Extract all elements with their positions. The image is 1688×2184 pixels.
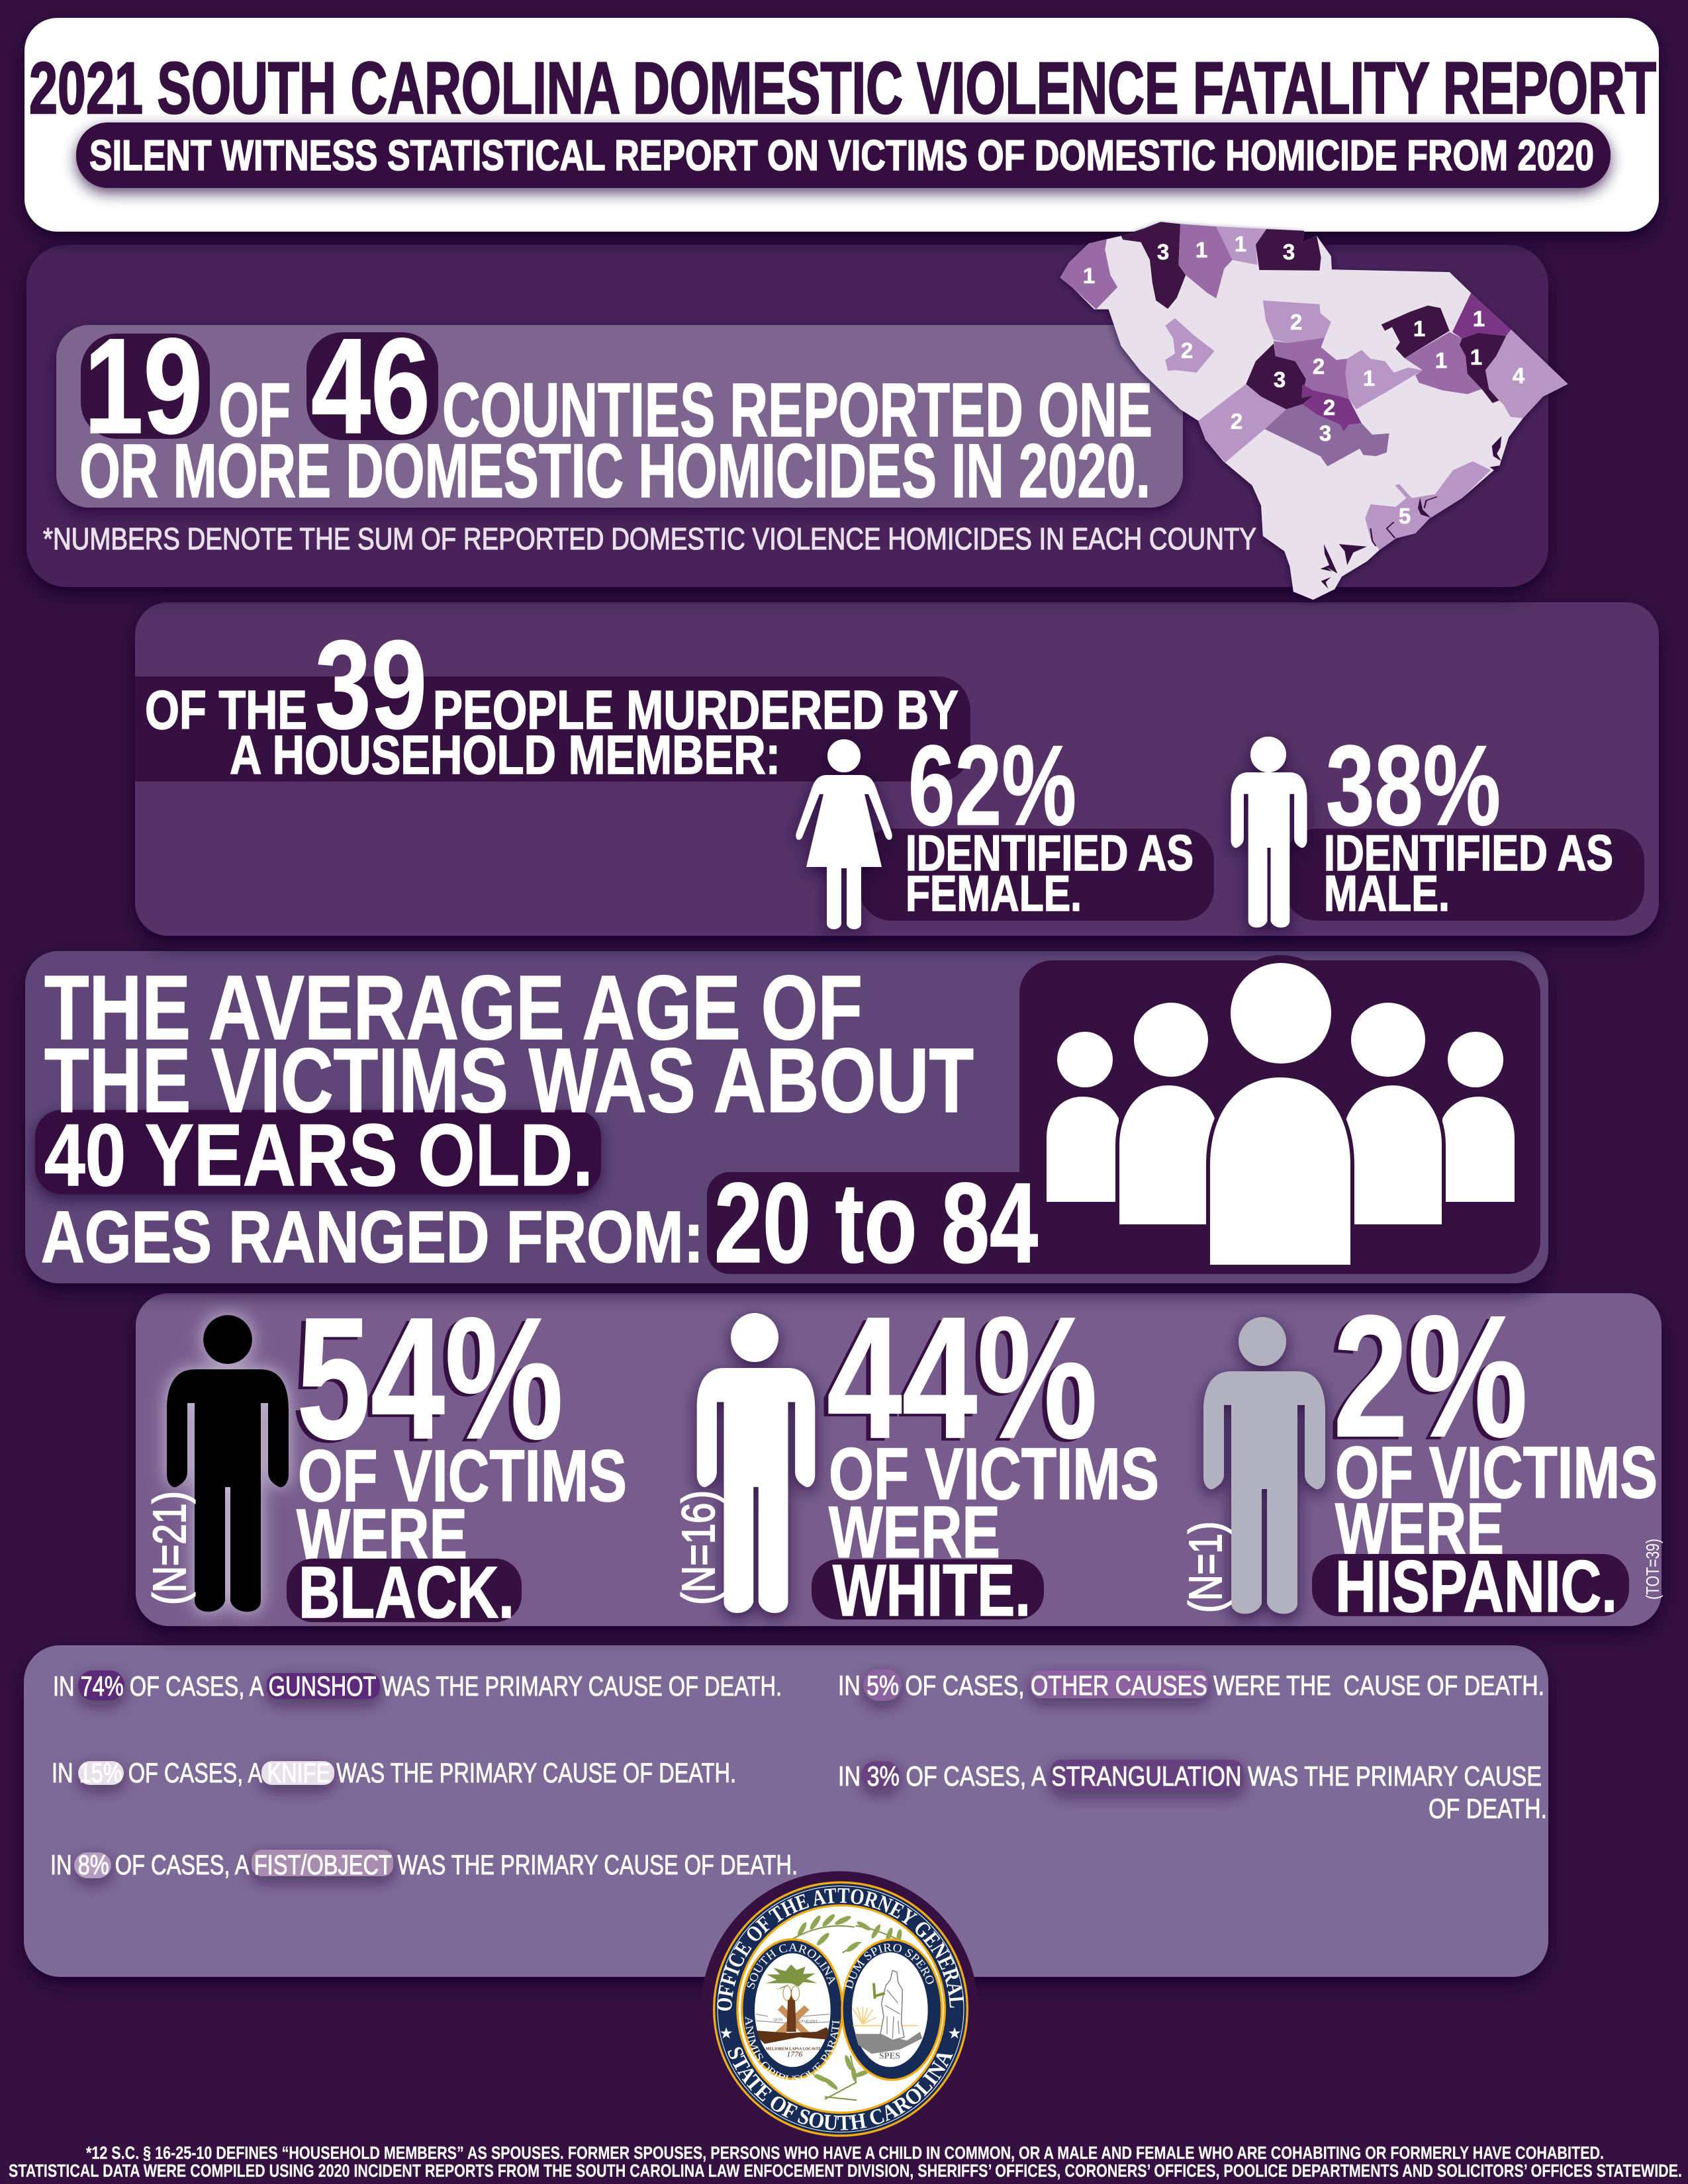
stat: 2 percent hispanic: 2% <box>1333 1279 1528 1473</box>
stat: 19 of 46 counties: OF <box>218 368 291 453</box>
stat: 19 of 46 counties: OR MORE DOMESTIC HOMICIDES IN 2020. <box>79 429 1150 514</box>
text: strangulation cause: IN 3% OF CASES, A STRANGULATION WAS THE PRIMARY CAUSE <box>838 1760 1542 1792</box>
panel: counties <box>26 245 1548 587</box>
seal left oval: palmetto: QUIS <box>773 2018 782 2022</box>
map county counts: 1 <box>1470 345 1482 369</box>
map county counts: 3 <box>1274 367 1286 392</box>
text: strangulation cause: OF DEATH. <box>1429 1793 1547 1824</box>
icon: black male figure <box>167 1315 289 1612</box>
label: total 39: (TOT=39) <box>1642 1539 1663 1600</box>
stat: 19 of 46 counties: COUNTIES REPORTED ONE <box>442 368 1152 453</box>
label: N=21: (N=21) <box>144 1491 195 1605</box>
pill: female <box>859 829 1214 921</box>
seal right oval: Spes: DUM SPIRO SPERO <box>845 1943 934 1989</box>
map county counts: 2 <box>1181 338 1193 363</box>
seal left oval: palmetto: SOUTH CAROLINA <box>747 1943 835 1989</box>
map county counts: 3 <box>1319 421 1331 445</box>
seal left oval: palmetto: 1776 <box>786 2050 802 2059</box>
stat: 62 percent female: FEMALE. <box>906 866 1082 922</box>
highlight pills: causes <box>74 1669 1243 1878</box>
panel: average age <box>25 951 1548 1287</box>
panel: causes of death <box>24 1645 1548 1977</box>
stat: 19 of 46 counties <box>79 310 1152 514</box>
stat: 44 percent white: 44% <box>827 1281 1098 1475</box>
seal outer text: office of the attorney general: OFFICE OF THE ATTORNEY GENERAL <box>717 1888 964 2011</box>
seal left oval: palmetto <box>741 1938 842 2080</box>
heading: of the 39 people: A HOUSEHOLD MEMBER: <box>230 724 780 786</box>
heading: of the 39 people: OF THE <box>145 679 307 741</box>
icon: white male figure <box>697 1313 815 1613</box>
stat: 62 percent female: 62% <box>908 722 1076 849</box>
map county counts: 5 <box>1399 504 1411 528</box>
text: of victims were white: WERE <box>829 1492 1000 1573</box>
dark panel behind people icon <box>1019 960 1540 1274</box>
text: gunshot cause: IN 74% OF CASES, A GUNSHOT WAS THE PRIMARY CAUSE OF DEATH. <box>53 1670 782 1702</box>
map county counts: 1 <box>1363 366 1375 390</box>
stat: 62 percent female <box>906 722 1194 922</box>
seal left oval: palmetto: MELIOREM LAPSA LOCAVIT <box>766 2046 821 2051</box>
stat: 44 percent white: 44% <box>822 1283 1093 1477</box>
stat: 20 to 84: 20 to 84 <box>714 1160 1038 1287</box>
map county counts: 2 <box>1290 310 1302 334</box>
stat: 38 percent male: IDENTIFIED AS <box>1324 825 1613 882</box>
text: of victims were white: WHITE. <box>833 1550 1031 1631</box>
seal stars <box>720 2024 962 2042</box>
map county counts: 1 <box>1235 232 1246 256</box>
stat: 40 years old: 40 YEARS OLD. <box>44 1107 593 1205</box>
text: fist or object cause: IN 8% OF CASES, A FIST/OBJECT WAS THE PRIMARY CAUSE OF DEATH. <box>50 1849 798 1880</box>
map county counts: 3 <box>1157 240 1169 264</box>
text: of victims were black: BLACK. <box>299 1552 514 1633</box>
map county counts: 3 <box>1283 240 1295 264</box>
stat: 2 percent hispanic: 2% <box>1329 1282 1523 1476</box>
stat: 19 of 46 counties: 19 <box>84 310 203 462</box>
text: of victims were black <box>287 1435 627 1633</box>
heading: of the 39 people: 39 <box>315 615 427 755</box>
seal left oval: palmetto: ANIMIS OPIBUSQUE PARATI <box>745 2016 839 2080</box>
stat: 38 percent male: MALE. <box>1324 866 1450 922</box>
map county counts: 1 <box>1435 348 1447 373</box>
map county counts: 2 <box>1313 354 1325 379</box>
seal stars: ★ <box>948 2024 962 2042</box>
stat: 19 of 46 counties: 46 <box>311 310 430 462</box>
pill: male <box>1285 829 1644 921</box>
text: knife cause: IN 15% OF CASES, A KNIFE WAS THE PRIMARY CAUSE OF DEATH. <box>52 1757 736 1788</box>
map county counts: 2 <box>1323 395 1335 420</box>
banner: household member <box>135 676 970 782</box>
footnote: map numbers: *NUMBERS DENOTE THE SUM OF REPORTED DOMESTIC VIOLENCE HOMICIDES IN EACH COUNTY <box>43 522 1256 556</box>
text: of victims were black: WERE <box>297 1494 467 1576</box>
subtitle pill <box>76 122 1611 188</box>
map county counts: 1 <box>1473 306 1485 331</box>
map county counts: 1 <box>1196 238 1207 262</box>
stat: 38 percent male: 38% <box>1326 722 1501 849</box>
icon: male figure <box>1231 737 1307 928</box>
panel: victims by race <box>136 1279 1663 1633</box>
text: strangulation cause <box>838 1760 1547 1824</box>
icon: female figure <box>796 739 892 929</box>
text: of victims were hispanic: WERE <box>1335 1488 1504 1570</box>
heading: average age <box>44 957 974 1132</box>
map county counts: 4 <box>1513 363 1525 388</box>
stat: 62 percent female: IDENTIFIED AS <box>906 825 1194 882</box>
heading: average age: THE AVERAGE AGE OF <box>44 957 863 1059</box>
label: N=1: (N=1) <box>1180 1522 1231 1613</box>
text: of victims were white <box>812 1433 1159 1631</box>
label: N=16: (N=16) <box>673 1490 724 1605</box>
seal right oval: Spes <box>841 1938 943 2081</box>
seal left oval: palmetto: SEPARABIT <box>796 2020 818 2024</box>
heading: average age: THE VICTIMS WAS ABOUT <box>44 1030 974 1132</box>
map county counts <box>1083 232 1525 528</box>
panel: victims by gender <box>135 602 1659 936</box>
stat: 54 percent black: 54% <box>292 1284 559 1478</box>
icon: group of people <box>1047 955 1515 1265</box>
seal: Office of the Attorney General <box>702 1871 977 2137</box>
laurel branches <box>792 1913 903 2100</box>
footnote: household member definition and data sources <box>9 2143 1682 2181</box>
inner panel: counties statement <box>56 325 1183 508</box>
map county counts: 1 <box>1083 263 1095 288</box>
heading: of the 39 people: PEOPLE MURDERED BY <box>433 679 959 741</box>
pill: age range <box>707 1172 1078 1274</box>
seal stars: ★ <box>720 2024 733 2042</box>
text: ages ranged from: AGES RANGED FROM: <box>41 1197 704 1278</box>
icon: grey male figure <box>1203 1317 1325 1614</box>
pill: average age value <box>35 1110 601 1194</box>
text: of victims were hispanic: HISPANIC. <box>1335 1546 1617 1627</box>
stat: 38 percent male <box>1324 722 1613 922</box>
text: of victims were white: OF VICTIMS <box>829 1433 1159 1515</box>
text: of victims were hispanic <box>1312 1432 1658 1627</box>
pill: 19 <box>81 334 210 439</box>
heading: of the 39 people <box>145 615 959 786</box>
map county counts: 2 <box>1231 409 1243 433</box>
text: of victims were black: OF VICTIMS <box>298 1435 627 1517</box>
map county counts: 1 <box>1413 316 1425 341</box>
stat: 54 percent black: 54% <box>297 1281 563 1475</box>
seal right oval: Spes: SPES <box>879 2051 900 2061</box>
pill: 46 <box>306 332 438 440</box>
map: South Carolina counties <box>1060 222 1568 600</box>
panel: header <box>24 18 1659 232</box>
seal outer text: state of south carolina: STATE OF SOUTH CAROLINA <box>728 2047 953 2130</box>
